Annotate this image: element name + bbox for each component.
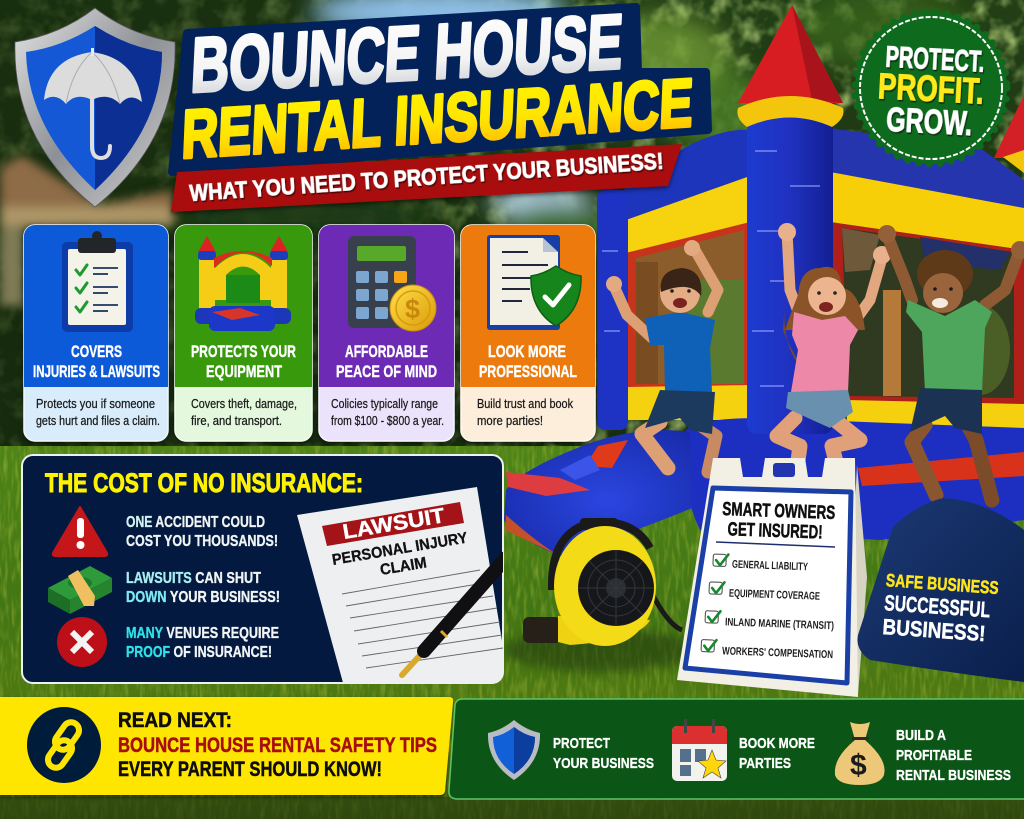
benefit text: PARTIES [739,755,791,772]
benefit text: YOUR BUSINESS [553,755,654,772]
icon: money bag [835,722,885,785]
sign heading: GET INSURED! [727,519,823,544]
sign checklist: WORKERS' COMPENSATION [722,645,833,661]
card description: more parties! [477,413,543,428]
card heading: INJURIES & LAWSUITS [33,362,160,381]
icon: calendar with star [672,719,727,781]
benefit text: BOOK MORE [739,735,815,752]
base [685,418,1024,540]
right window [830,222,1024,404]
card description [477,396,573,428]
central tower cone [737,5,844,127]
card heading: PROTECTS YOUR [191,342,296,361]
lawsuit paper and pen: PERSONAL INJURY [331,529,469,569]
child in green shirt [878,225,1024,500]
right tower cone [994,95,1024,173]
badge: protect profit grow: PROFIT. [877,65,985,112]
card heading [479,342,577,381]
card heading: PROFESSIONAL [479,362,577,381]
card heading: LOOK MORE [488,342,566,361]
navy storage bag: BUSINESS! [882,614,986,646]
sign checklist: EQUIPMENT COVERAGE [729,588,820,603]
panel: affordable peace of mind [319,225,454,441]
callout text: EVERY PARENT SHOULD KNOW! [118,758,382,781]
benefit text [739,735,815,772]
benefit text: PROFITABLE [896,747,972,764]
card description [191,396,297,428]
warning text: ONE ACCIDENT COULD [126,514,265,531]
card description: Protects you if someone [36,396,155,411]
card heading [33,342,160,381]
sign checklist: INLAND MARINE (TRANSIT) [725,616,834,632]
card description: fire, and transport. [191,413,282,428]
left column [597,190,628,430]
callout: read next [0,697,453,795]
panel: covers injuries and lawsuits [24,225,168,441]
card heading: AFFORDABLE [345,342,428,361]
card heading [336,342,437,381]
panel: protects your equipment [175,225,312,441]
venue text [126,625,279,661]
slide [504,430,692,556]
callout text [118,709,437,781]
child in pink shirt [777,223,891,470]
lawsuit text: DOWN YOUR BUSINESS! [126,589,280,606]
lawsuit text [126,570,280,606]
benefit text [896,727,1011,784]
benefit text: BUILD A [896,727,946,744]
icon: clipboard checklist [62,231,133,332]
icon: chain link [27,707,101,783]
navy storage bag [858,498,1024,682]
sign checklist: GENERAL LIABILITY [732,559,809,573]
shield logo with umbrella [15,8,175,207]
card heading [191,342,296,381]
right roof [830,128,1024,210]
badge: protect profit grow [855,12,1007,164]
panel: business benefits [449,699,1024,799]
lawsuit paper and pen: LAWSUIT [341,504,447,544]
panel: the cost of no insurance [22,455,510,690]
lawsuit text: LAWSUITS CAN SHUT [126,570,261,587]
lawsuit paper and pen [297,487,510,690]
card description: Build trust and book [477,396,573,411]
left window [626,222,750,388]
sign checklist [701,554,835,661]
card description: Covers theft, damage, [191,396,297,411]
panel heading: THE COST OF NO INSURANCE: [45,468,363,498]
A-frame sign: smart owners get insured [677,458,867,697]
icon: mini bounce house [195,236,291,331]
card description: from $100 - $800 a year. [331,413,444,428]
card description [331,396,444,428]
card description: gets hurt and files a claim. [36,413,160,428]
umbrella [44,48,142,158]
sign heading [721,499,836,544]
card heading: COVERS [71,342,122,361]
panel: look more professional [461,225,595,441]
icon: red x circle [57,617,107,667]
card description: Colicies typically range [331,396,438,411]
left roof [618,130,750,222]
venue text: MANY VENUES REQUIRE [126,625,279,642]
icon: calculator and coin: $ [405,294,420,324]
title line: rental insurance: RENTAL INSURANCE [180,65,695,173]
icon: shield [488,720,540,780]
sign heading: SMART OWNERS [722,499,836,524]
lawsuit paper and pen: CLAIM [379,554,428,579]
callout text: READ NEXT: [118,709,232,732]
card heading: EQUIPMENT [206,362,282,381]
badge: protect profit grow: GROW. [885,101,973,143]
portable air blower [523,518,682,646]
venue text: PROOF OF INSURANCE! [126,644,272,661]
child in blue shirt [606,240,718,472]
central tower [747,112,833,434]
icon: document with shield [487,235,581,330]
inflatable bounce house [504,5,1024,556]
benefit text: PROTECT [553,735,610,752]
warning text: COST YOU THOUSANDS! [126,533,278,550]
red subtitle ribbon: WHAT YOU NEED TO PROTECT YOUR BUSINESS! [189,148,664,206]
icon: warning triangle [53,507,107,556]
warning text [126,514,278,550]
icon: money bag: $ [850,749,867,782]
callout text: BOUNCE HOUSE RENTAL SAFETY TIPS [118,734,437,757]
icon: stack of money [48,566,112,614]
benefit text [553,735,654,772]
icon: calculator and coin [348,236,436,331]
card description [36,396,160,428]
title banner [171,0,708,212]
card heading: PEACE OF MIND [336,362,437,381]
